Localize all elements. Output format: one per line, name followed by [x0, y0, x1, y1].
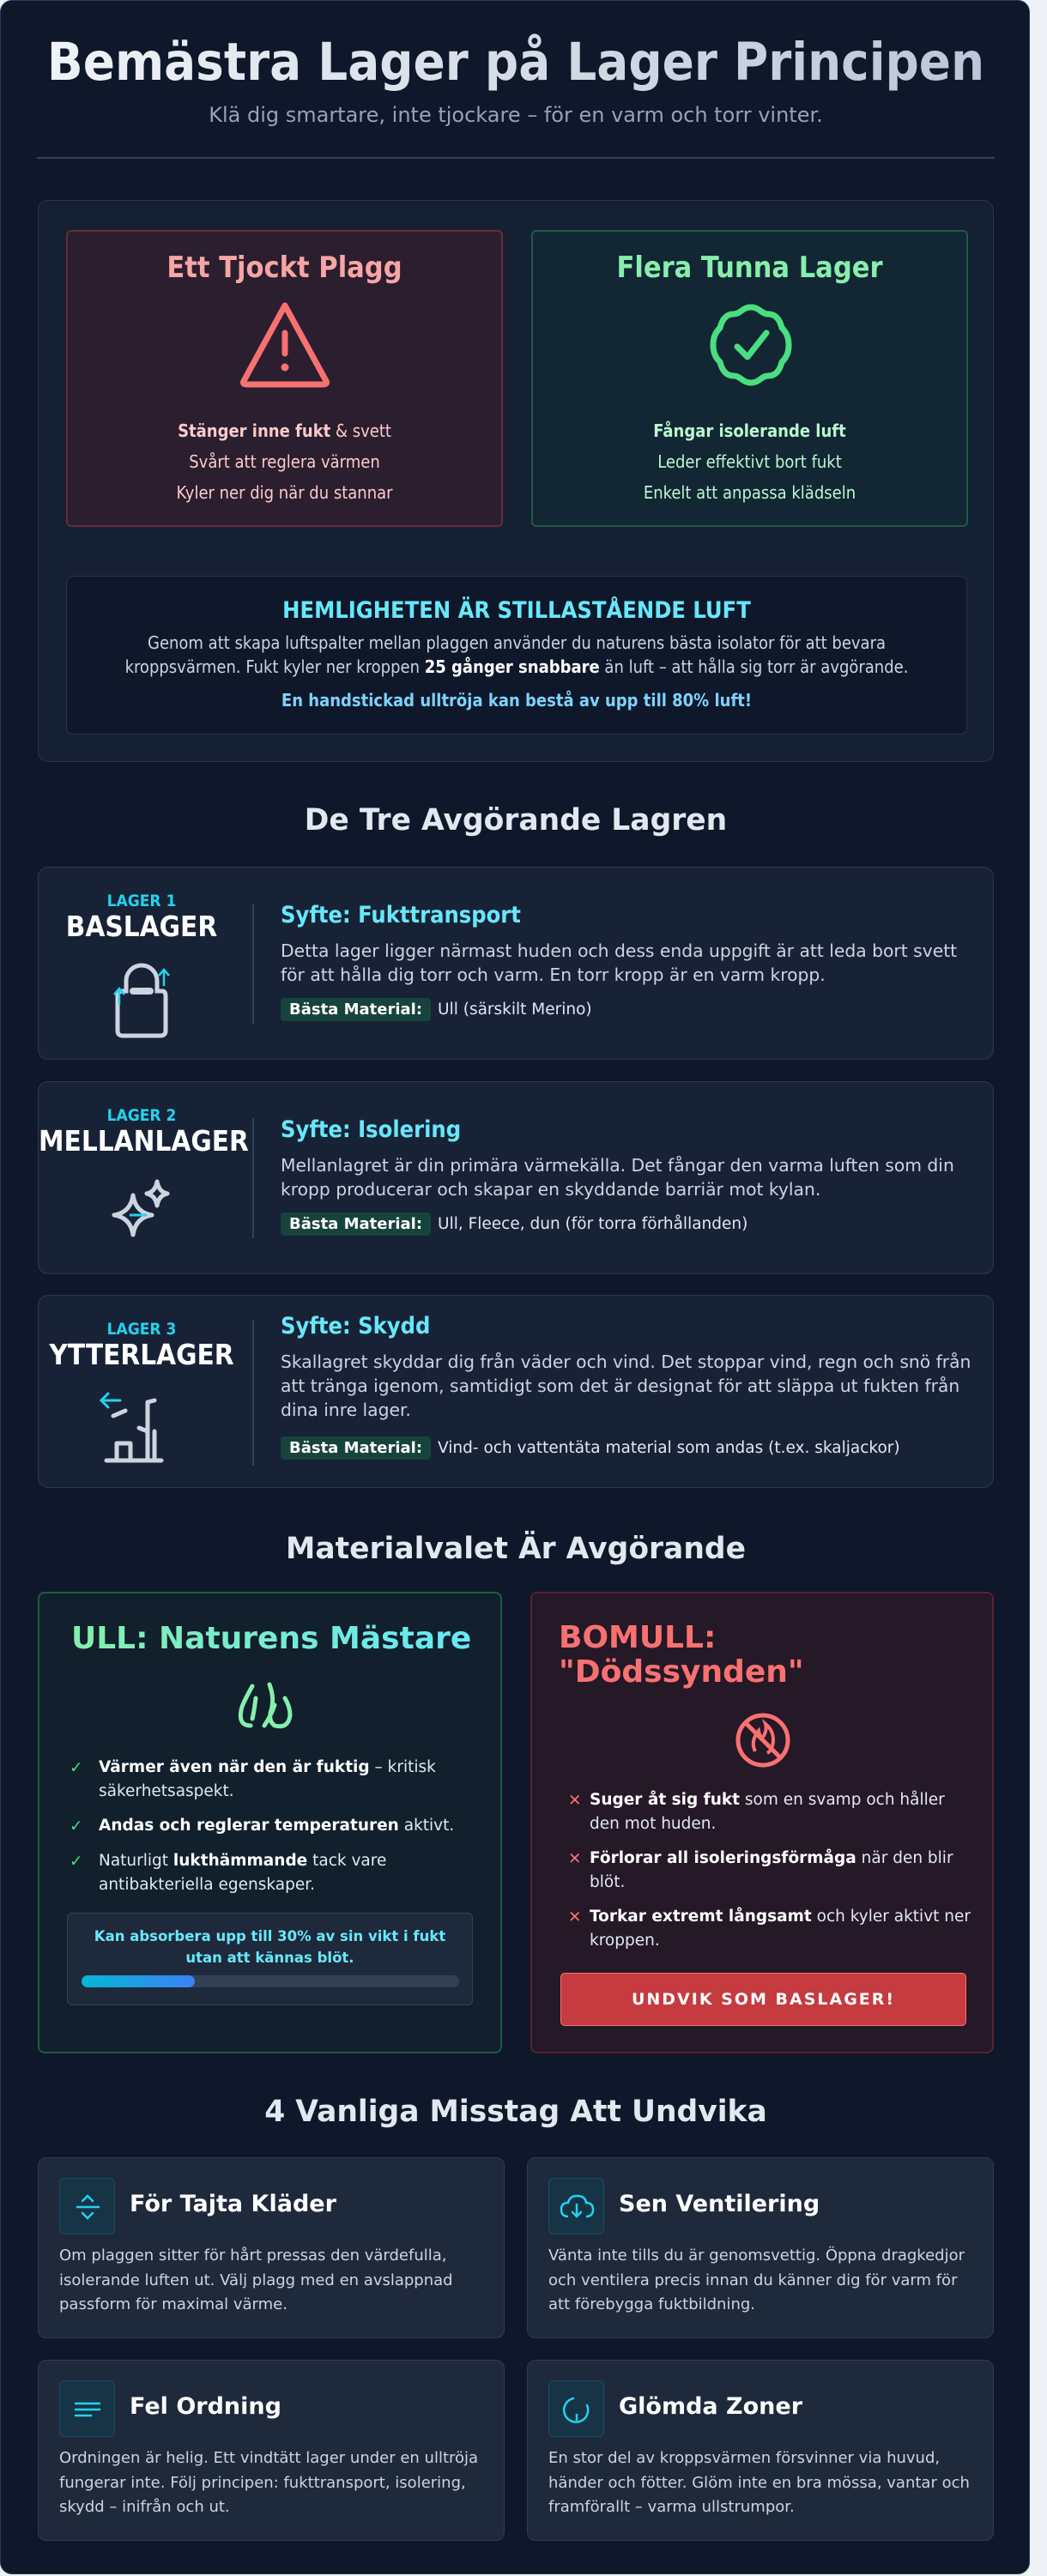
card: forgotten zones: En stor del av kroppsvärmen försvinner via huvud, händer och fötter. Glöm inte en bra mössa, vantar och framförallt – varma ullstrumpor.: [548, 2449, 970, 2516]
icon: warning: [240, 302, 330, 388]
card: layer 3: Syfte: Skydd: [281, 1313, 430, 1339]
icon: flames: [239, 1682, 292, 1728]
callout: still air: En handstickad ulltröja kan bestå av upp till 80% luft!: [281, 690, 752, 711]
text list: [644, 420, 856, 503]
panel: wool: ✓: [70, 1817, 83, 1835]
callout: still air: Genom att skapa luftspalter mellan plaggen använder du naturens bästa isolator för att bevara kroppsvärmen. Fukt kyler ner kroppen 25 gånger snabbare än luft – att hålla sig torr är avgörande.: [125, 632, 908, 677]
card: layer 2: Mellanlagret är din primära värmekälla. Det fångar den varma luften som din kropp producerar och skapar en skyddande barriär mot kylan.: [281, 1155, 954, 1200]
text list: Stänger inne fukt & svett: [178, 420, 391, 441]
icon: base layer: [113, 963, 170, 1038]
text list: [176, 420, 393, 503]
text list: Leder effektivt bort fukt: [657, 451, 842, 472]
card: tight clothes: För Tajta Kläder: [130, 2191, 336, 2217]
panel: cotton: ✕: [568, 1850, 582, 1868]
card: layer 2: MELLANLAGER: [39, 1124, 249, 1158]
icon: no fire: [736, 1713, 790, 1768]
panel: wool: ✓: [70, 1853, 83, 1871]
panel: comparison: [38, 200, 994, 762]
card: layer 2: LAGER 2: [107, 1106, 176, 1125]
button: avoid: UNDVIK SOM BASLAGER!: [632, 1990, 895, 2009]
card: layer 1: LAGER 1: [107, 892, 176, 910]
panel: cotton: Suger åt sig fukt som en svamp och håller den mot huden.: [590, 1791, 945, 1833]
card: layer 2: [38, 1081, 994, 1274]
callout: progress: [67, 1913, 473, 2005]
panel: cotton: [530, 1592, 994, 2053]
subtitle: Klä dig smartare, inte tjockare – för en varm och torr vinter.: [209, 103, 823, 127]
card: layer 2: Ull, Fleece, dun (för torra förhållanden): [438, 1215, 747, 1233]
icon: badge check: [711, 304, 791, 386]
icon: compress: [59, 2178, 115, 2234]
panel: wool: Naturligt lukthämmande tack vare antibakteriella egenskaper.: [99, 1852, 386, 1894]
card: layer 3: [38, 1295, 994, 1488]
callout: still air: [66, 576, 967, 735]
panel: cotton: Förlorar all isoleringsförmåga när den blir blöt.: [590, 1849, 953, 1891]
card: thick garment: [66, 230, 503, 527]
panel: wool: ✓: [70, 1759, 83, 1777]
text list: Svårt att reglera värmen: [189, 451, 380, 472]
callout: progress: Kan absorbera upp till 30% av sin vikt i fukt: [94, 1928, 445, 1944]
icon: lines: [59, 2380, 115, 2437]
card: forgotten zones: Glömda Zoner: [619, 2393, 802, 2420]
card: late ventilation: Sen Ventilering: [619, 2191, 820, 2217]
card: late ventilation: Vänta inte tills du är genomsvettig. Öppna dragkedjor och ventilera precis innan du känner dig för varm för att förebygga fuktbildning.: [548, 2246, 965, 2313]
panel: cotton: ✕: [568, 1908, 582, 1926]
panel: cotton: BOMULL:: [559, 1620, 716, 1655]
callout: still air: HEMLIGHETEN ÄR STILLASTÅENDE LUFT: [282, 597, 751, 624]
heading: Ett Tjockt Plagg: [166, 251, 402, 285]
heading: layers: De Tre Avgörande Lagren: [305, 803, 727, 838]
card: late ventilation: [527, 2157, 994, 2338]
card: forgotten zones: [527, 2360, 994, 2541]
card: layer 3: YTTERLAGER: [49, 1338, 234, 1371]
card: tight clothes: [38, 2157, 505, 2338]
card: layer 2: Syfte: Isolering: [281, 1116, 461, 1143]
card: layer 1: Ull (särskilt Merino): [438, 1001, 592, 1019]
panel: wool: ULL: Naturens Mästare: [71, 1621, 471, 1656]
panel: cotton: "Dödssynden": [559, 1654, 804, 1690]
card: layer 3: Vind- och vattentäta material som andas (t.ex. skaljackor): [438, 1439, 900, 1457]
card: tight clothes: Om plaggen sitter för hårt pressas den värdefulla, isolerande luften ut. Välj plagg med en avslappnad passform för maximal värme.: [59, 2246, 453, 2313]
icon: loader: [548, 2380, 604, 2437]
card: layer 3: Bästa Material:: [289, 1439, 422, 1457]
card: layer 1: Syfte: Fukttransport: [281, 902, 521, 928]
text list: Fångar isolerande luft: [653, 420, 846, 441]
heading: Flera Tunna Lager: [616, 251, 883, 285]
panel: cotton: Torkar extremt långsamt och kyler aktivt ner kroppen.: [590, 1908, 971, 1950]
card: wrong order: Fel Ordning: [130, 2393, 281, 2420]
card: layer 3: LAGER 3: [107, 1320, 176, 1339]
heading: mistakes: 4 Vanliga Misstag Att Undvika: [264, 2095, 767, 2129]
card: layer 2: Bästa Material:: [289, 1215, 422, 1233]
icon: sparkles: [112, 1179, 170, 1237]
panel: cotton: ✕: [568, 1792, 582, 1810]
heading: materials: Materialvalet Är Avgörande: [286, 1532, 746, 1566]
panel: wool: Värmer även när den är fuktig – kritisk säkerhetsaspekt.: [99, 1758, 436, 1800]
icon: shell/wind: [100, 1392, 163, 1462]
card: thin layers: [531, 230, 968, 527]
card: wrong order: Ordningen är helig. Ett vindtätt lager under en ulltröja fungerar inte. Följ principen: fukttransport, isolering, skydd – inifrån och ut.: [59, 2449, 478, 2516]
card: layer 3: Skallagret skyddar dig från väder och vind. Det stoppar vind, regn och snö från att tränga igenom, samtidigt som det är designat för att släppa ut fukten från dina inre lager.: [281, 1351, 971, 1420]
callout: progress: utan att kännas blöt.: [185, 1950, 354, 1966]
card: wrong order: [38, 2360, 505, 2541]
text list: Kyler ner dig när du stannar: [176, 482, 393, 503]
panel: wool: Andas och reglerar temperaturen aktivt.: [99, 1817, 454, 1835]
card: layer 1: Bästa Material:: [289, 1001, 422, 1019]
button: avoid: [560, 1973, 966, 2026]
panel: wool: [38, 1592, 502, 2053]
card: layer 1: BASLAGER: [66, 910, 217, 943]
icon: cloud download: [548, 2178, 604, 2234]
text list: Enkelt att anpassa klädseln: [644, 482, 856, 503]
title: Bemästra Lager på Lager Principen: [47, 32, 984, 93]
card: layer 1: Detta lager ligger närmast huden och dess enda uppgift är att leda bort svett för att hålla dig torr och varm. En torr kropp är en varm kropp.: [281, 940, 957, 985]
card: layer 1: [38, 867, 994, 1060]
